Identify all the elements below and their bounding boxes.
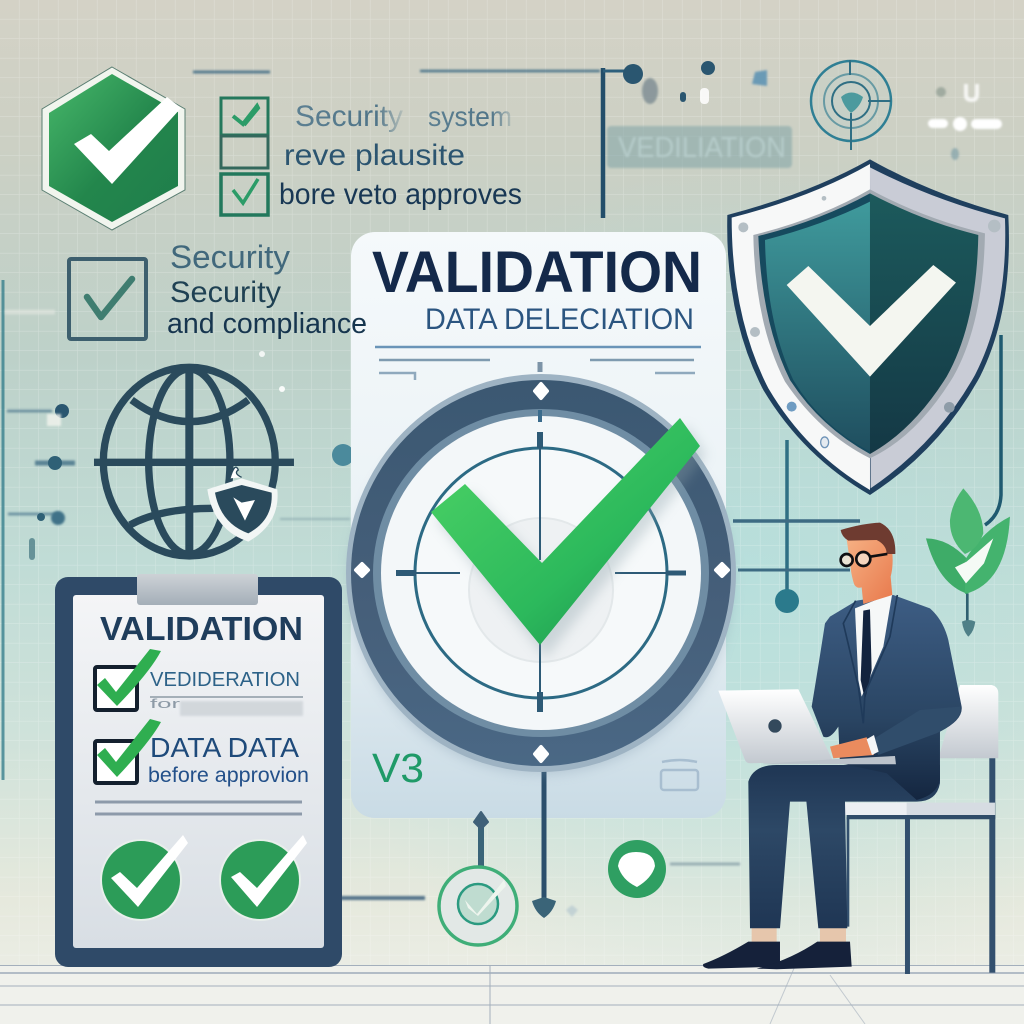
checklist text: reve plausite: [284, 139, 465, 172]
checklist text: bore veto approves: [279, 178, 522, 211]
version label: V3: [372, 745, 424, 791]
central dial: [346, 362, 736, 774]
checklist row one: VEDIDERATION: [150, 669, 300, 691]
security and compliance item: [69, 239, 367, 340]
icon: check circle right: [219, 835, 307, 921]
icon: check circle left: [100, 835, 188, 921]
compliance text: Security: [170, 276, 281, 309]
faded validation badge: VEDILIATION: [618, 132, 786, 164]
connector stubs below card: [474, 770, 578, 918]
ring markers: [356, 384, 728, 761]
card subtitle: DATA DELECIATION: [425, 303, 694, 336]
socks: [752, 927, 846, 943]
jacket: [812, 593, 962, 800]
card rules: [375, 347, 701, 380]
small node dots: [29, 61, 799, 613]
checklist row one: for: [150, 696, 181, 711]
checklist row two: DATA DATA: [150, 732, 299, 763]
compliance text: and compliance: [167, 308, 367, 340]
checkbox: compliance: [69, 259, 146, 339]
shield rivets: [738, 196, 1001, 448]
illustration: man with laptop on chair: [703, 523, 998, 974]
checklist row two: [95, 719, 309, 787]
hand and cuff: [830, 735, 879, 758]
checklist text: system: [428, 101, 512, 132]
panel: central validation card: [351, 232, 726, 818]
shoes: [703, 942, 852, 969]
clipboard title: VALIDATION: [100, 610, 303, 647]
icon: document slot: [661, 760, 698, 790]
checklist top: [221, 98, 522, 215]
checklist row two: before approvion: [148, 764, 309, 787]
compliance text: [167, 239, 367, 340]
trousers: [748, 765, 940, 928]
shield badge: [207, 467, 278, 542]
panel: clipboard: [55, 574, 342, 967]
chair: [845, 685, 998, 974]
floor: [0, 965, 1024, 1024]
checkboxes top: [221, 98, 268, 215]
checklist text: Security: [295, 100, 403, 133]
icon: leaf check: [926, 488, 1010, 637]
faded glyphs top right: [928, 84, 1002, 160]
icon: green dot bottom: [608, 840, 666, 898]
checklist text: [279, 100, 522, 211]
glasses: [841, 552, 887, 566]
checklist row one: [95, 649, 303, 716]
card title: VALIDATION: [372, 240, 702, 305]
laptop: [718, 689, 896, 764]
icon: green hexagon badge: [42, 67, 185, 230]
icon: globe with shield: [94, 367, 294, 556]
head: [841, 523, 895, 604]
icon: target: [811, 60, 891, 150]
icon: large green check: [431, 418, 706, 658]
crosshair: [396, 362, 686, 712]
compliance text: Security: [170, 239, 290, 275]
icon: large shield: [727, 159, 1009, 495]
clipboard clip: [137, 574, 258, 605]
icon: ring check bottom: [439, 867, 517, 945]
clipboard rules: [95, 802, 302, 814]
connector lines: [3, 68, 1001, 898]
